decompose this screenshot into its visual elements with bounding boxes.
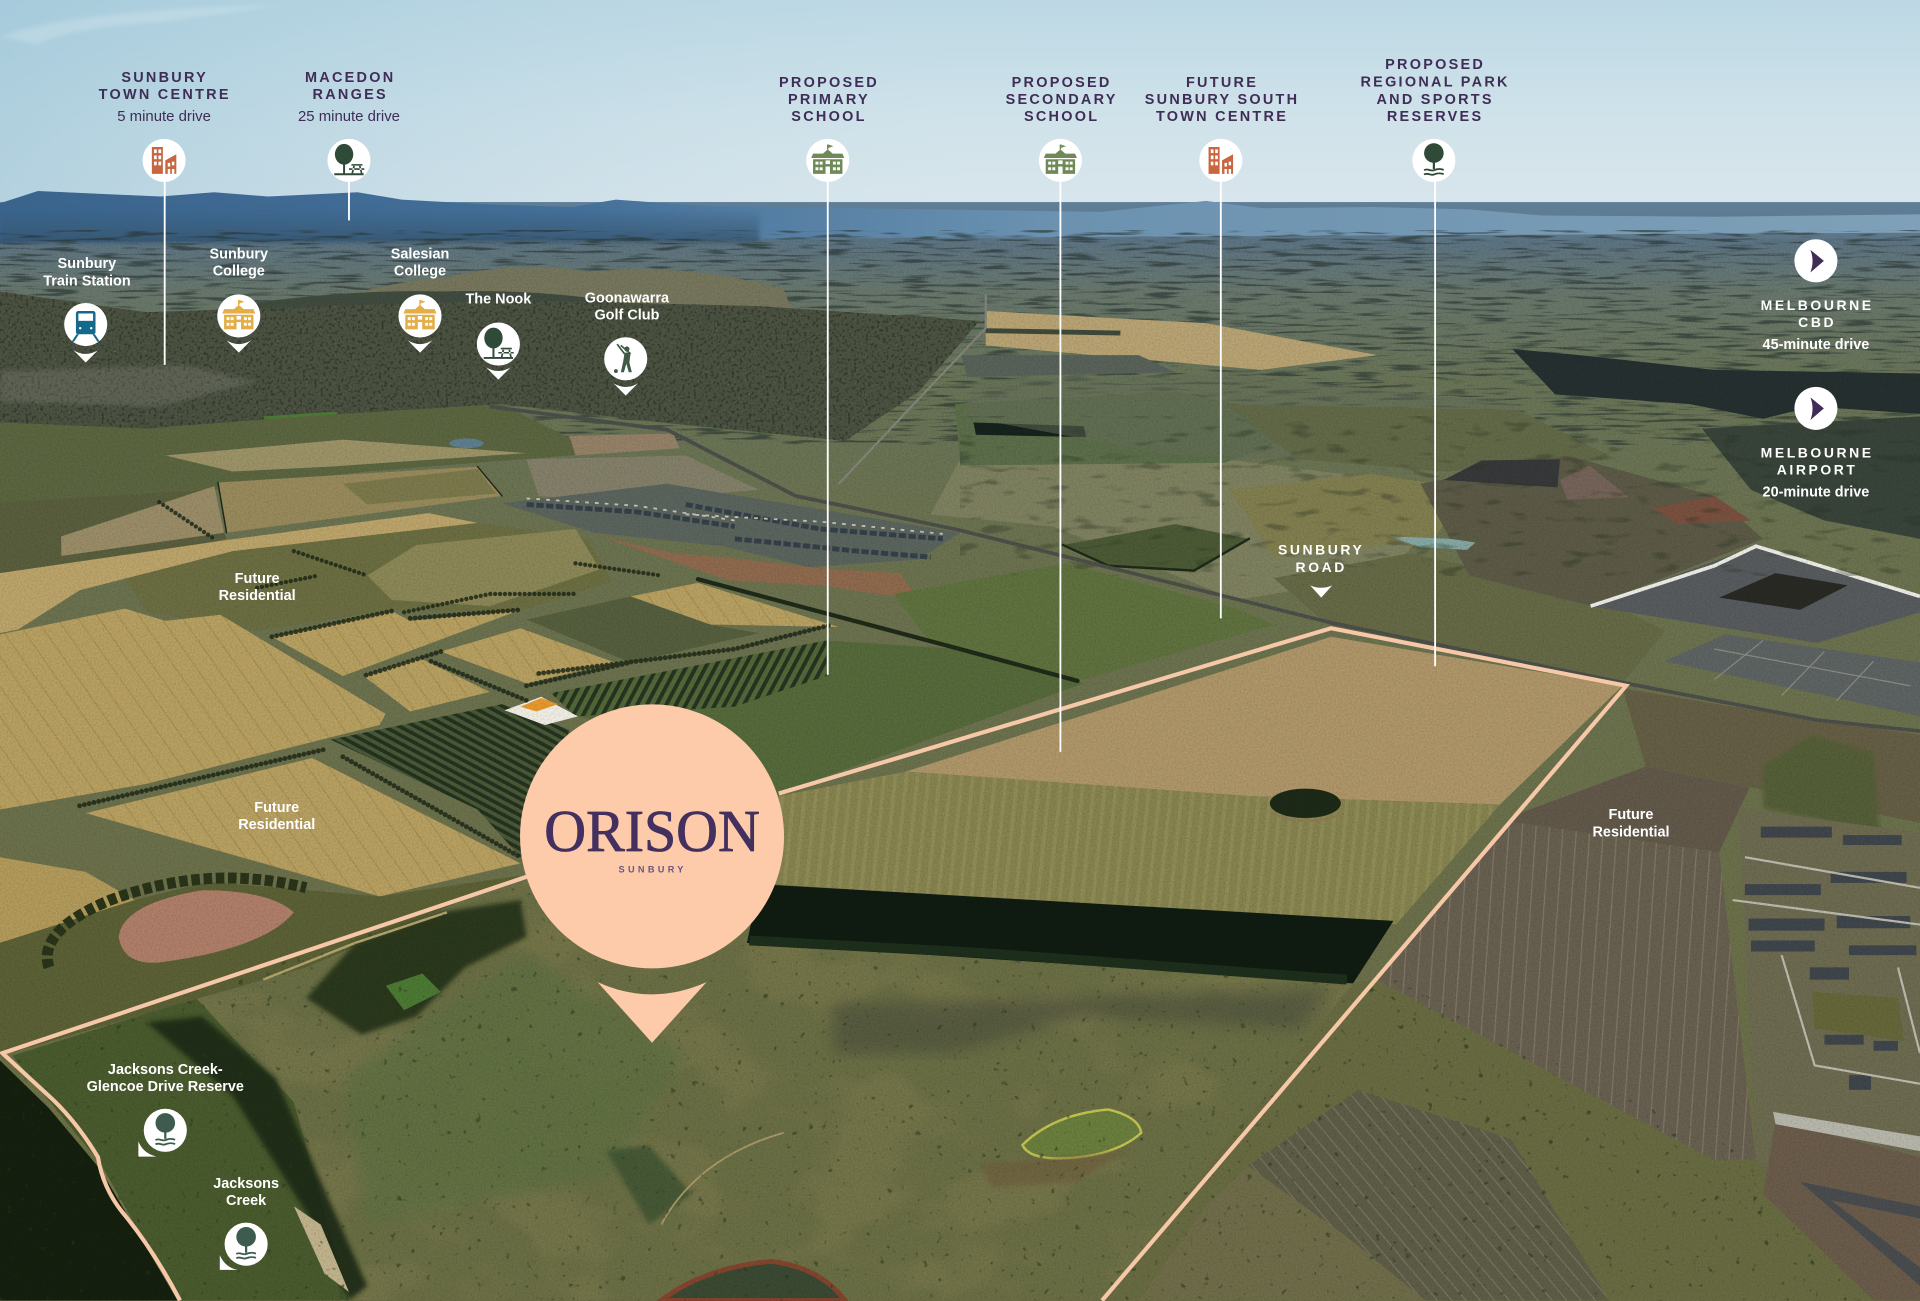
pin: Salesian College: College <box>394 264 446 280</box>
lower site shrubs <box>0 882 1353 1301</box>
quarry <box>1420 456 1763 606</box>
estate rooftop rows <box>527 505 943 557</box>
icon: arrow <box>1810 250 1824 272</box>
destination: Melbourne CBD: CBD <box>1798 314 1836 330</box>
pin: Salesian College: Salesian <box>391 246 449 262</box>
site upper field <box>906 637 1622 805</box>
greens north of paddocks <box>955 392 1335 465</box>
south ploughed field two <box>1139 1166 1425 1301</box>
sky <box>0 0 1920 227</box>
olive paddock <box>122 523 612 631</box>
dry fields far <box>986 311 1378 370</box>
destination: Melbourne CBD: 45-minute drive <box>1763 337 1869 353</box>
suburb streets <box>1733 857 1920 1084</box>
label: MACEDON <box>305 70 395 86</box>
clump soil ring <box>1273 814 1341 821</box>
label: PROPOSED <box>779 75 879 91</box>
pin: Proposed Regional Park and Sports Reserves: REGIONAL PARK <box>1360 74 1510 90</box>
pin: Jacksons Creek: Jacksons <box>213 1176 279 1192</box>
pointer <box>138 1141 157 1157</box>
left forest <box>0 1060 178 1301</box>
pin: Goonawarra Golf Club: Goonawarra <box>585 290 670 306</box>
label: SUNBURY <box>121 70 208 86</box>
pin: Goonawarra Golf Club <box>585 290 670 396</box>
town centre lighter strip <box>0 365 257 407</box>
marker <box>144 1109 187 1152</box>
dotted tree rows <box>80 610 833 857</box>
tree lines <box>80 467 1249 857</box>
pin: Jacksons Creek-Glencoe Drive Reserve: Glencoe Drive Reserve <box>87 1079 244 1095</box>
fence <box>1063 539 1249 571</box>
dry fields gap <box>986 328 1120 336</box>
paddocks north of road <box>931 459 1469 600</box>
west low land <box>0 490 227 576</box>
pin: Future Sunbury South Town Centre: SUNBURY SOUTH <box>1145 92 1299 108</box>
east ploughed field <box>1376 822 1756 1160</box>
pin: Sunbury Train Station: Sunbury <box>58 256 116 272</box>
pin: Sunbury College <box>209 246 268 353</box>
quarry red earth <box>1653 496 1751 524</box>
main road <box>490 407 1920 731</box>
homestead lawn <box>386 974 441 1010</box>
destination: Melbourne Airport: 20-minute drive <box>1763 485 1869 501</box>
central tree clump <box>1270 789 1341 818</box>
suburb houses <box>1745 827 1916 1090</box>
gold field two <box>272 610 520 676</box>
green grass left <box>343 955 686 1225</box>
pink lake <box>119 890 294 963</box>
tan paddock west <box>165 440 527 471</box>
label: FUTURE <box>1186 75 1258 91</box>
label: Sunbury Road: ROAD <box>1296 559 1347 575</box>
green bank <box>12 998 349 1301</box>
pin: Macedon Ranges: RANGES <box>313 87 388 103</box>
forest right lower <box>1702 416 1920 539</box>
township tree speckle <box>0 288 980 447</box>
south-east shrubs <box>1102 980 1920 1301</box>
marker <box>225 1223 268 1266</box>
pin: Macedon Ranges <box>298 70 400 220</box>
pointer <box>220 1255 238 1270</box>
red earthworks <box>600 536 918 600</box>
pin: Sunbury Train Station <box>43 256 131 362</box>
marker <box>64 303 107 346</box>
green sports fields <box>263 411 422 440</box>
homestead trees <box>306 900 527 1035</box>
north road <box>839 294 986 484</box>
far field streaks <box>0 230 1920 445</box>
homestead <box>504 697 578 725</box>
destination: Melbourne Airport <box>1761 387 1874 501</box>
distant mountains <box>0 191 1920 242</box>
estate ground <box>502 484 960 567</box>
connector line <box>164 171 166 365</box>
pin: Proposed Secondary School <box>1006 75 1118 752</box>
farm break <box>218 467 502 533</box>
homestead track <box>263 912 447 980</box>
mountain lower shadow <box>0 206 759 242</box>
township roofs <box>0 288 980 447</box>
paddock trees <box>159 502 661 612</box>
pin: Jacksons Creek: Creek <box>226 1193 267 1209</box>
south ploughed field <box>1248 1090 1609 1301</box>
grey tailings <box>1591 546 1920 643</box>
pine strip hedge <box>749 940 1347 980</box>
marker <box>398 294 442 337</box>
pin: Proposed Primary School <box>779 75 879 675</box>
green paddock south of road <box>894 563 1273 680</box>
bottom dam <box>661 1261 845 1301</box>
pine block <box>973 422 1086 437</box>
paddock west <box>61 486 224 556</box>
marker <box>1794 387 1837 430</box>
pin: Macedon Ranges: 25 minute drive <box>298 108 400 125</box>
site lower field <box>771 771 1500 925</box>
teal pond <box>1390 536 1476 550</box>
gold field five <box>631 583 839 627</box>
pin: Sunbury Town Centre <box>99 70 231 365</box>
far estate <box>961 355 1176 377</box>
township <box>0 291 980 441</box>
wordmark: ORISON <box>544 799 760 864</box>
south-east road <box>1800 1182 1920 1286</box>
pond small <box>449 438 484 448</box>
icon: train <box>72 311 100 342</box>
pin: Proposed Regional Park and Sports Reserves: AND SPORTS <box>1376 92 1494 108</box>
forest right <box>1512 349 1920 419</box>
construction tan pad <box>569 434 680 456</box>
estate pale rooftops <box>527 498 943 534</box>
gold field south-west <box>86 758 520 896</box>
pin: Goonawarra Golf Club: Golf Club <box>594 308 660 324</box>
fenced property <box>1063 524 1249 571</box>
tailings dark centre <box>1719 573 1848 610</box>
icon: arrow <box>1810 397 1824 420</box>
dirt bottom right <box>1763 1120 1920 1301</box>
new streets <box>1773 1112 1920 1151</box>
sub wordmark: SUNBURY <box>619 865 687 875</box>
boundary hedges <box>698 579 1078 681</box>
quarry dark mound <box>1444 459 1560 487</box>
lighter grazing paddock <box>367 529 600 606</box>
label: Sunbury Road <box>1278 542 1364 598</box>
Orison logo badge <box>520 704 784 1043</box>
pin: Proposed Regional Park and Sports Reserves <box>1360 57 1510 666</box>
sky tint left <box>0 0 1920 227</box>
hill slopes centre <box>1224 404 1616 471</box>
pine strip <box>747 884 1393 983</box>
pin: Jacksons Creek-Glencoe Drive Reserve <box>87 1062 244 1157</box>
low land round dam <box>0 876 520 1056</box>
pin: Sunbury College: College <box>213 264 265 280</box>
pin: Proposed Primary School: SCHOOL <box>791 109 867 125</box>
label: Future Residential east: Future <box>1609 807 1653 823</box>
construction ground <box>527 456 759 502</box>
label: Future Residential east: Residential <box>1593 824 1670 840</box>
dam surrounds <box>980 1151 1127 1188</box>
mid-ground streaks <box>960 416 1920 576</box>
yellow grass slope <box>1229 474 1474 557</box>
lower site mottling <box>104 925 1352 1300</box>
marker <box>477 323 520 366</box>
destination: Melbourne CBD: MELBOURNE <box>1761 297 1874 313</box>
pin: Future Sunbury South Town Centre: TOWN CENTRE <box>1156 109 1288 125</box>
lot greens <box>1812 992 1904 1041</box>
destination: Melbourne Airport: AIRPORT <box>1777 462 1858 478</box>
forested corner east <box>1763 735 1880 833</box>
pads grid <box>1714 640 1910 700</box>
pin: The Nook: The Nook <box>465 292 532 308</box>
dam green <box>1022 1109 1141 1158</box>
marker <box>1794 239 1837 282</box>
marker <box>327 139 371 182</box>
site boundary outline <box>2 628 1626 1301</box>
marker <box>1199 139 1242 182</box>
pin: Jacksons Creek <box>213 1176 279 1270</box>
marker <box>217 294 260 337</box>
orchard north <box>551 640 827 716</box>
pale creek sand <box>294 1206 349 1292</box>
pin: Sunbury Town Centre: 5 minute drive <box>117 108 211 125</box>
marker <box>806 139 849 182</box>
rural right <box>1273 554 1665 683</box>
label: Future Residential west: Future <box>254 800 299 816</box>
destination: Melbourne Airport: MELBOURNE <box>1761 444 1874 460</box>
pin: Proposed Secondary School: SECONDARY <box>1006 92 1118 108</box>
paddock east of road <box>1622 688 1920 823</box>
curved track <box>661 1133 784 1225</box>
pin: Proposed Primary School: PRIMARY <box>788 92 870 108</box>
pin: Future Sunbury South Town Centre <box>1145 75 1299 618</box>
pin: Proposed Secondary School: SCHOOL <box>1024 109 1099 125</box>
dark creek trees <box>147 1016 367 1301</box>
label: PROPOSED <box>1012 75 1112 91</box>
pin: Jacksons Creek-Glencoe Drive Reserve: Jacksons Creek- <box>108 1062 223 1078</box>
south-east land <box>1102 980 1920 1301</box>
pin: Sunbury Town Centre: TOWN CENTRE <box>99 87 231 103</box>
orchard west <box>331 704 569 857</box>
tree ring dam <box>47 878 306 967</box>
pin: Salesian College <box>391 246 449 353</box>
quarry brown mound <box>1560 465 1629 500</box>
green land west <box>0 404 600 502</box>
badge pointer <box>598 982 707 1043</box>
pin: The Nook <box>465 292 532 380</box>
label: Future Residential north: Residential <box>219 588 296 604</box>
brown paddock <box>218 467 502 533</box>
large gold field left <box>0 609 386 809</box>
grey pads <box>1664 634 1920 716</box>
pin: Sunbury Train Station: Train Station <box>43 273 131 289</box>
darker hill ridge <box>233 291 686 323</box>
marker <box>604 337 647 380</box>
far green paddock <box>961 373 1518 463</box>
marker <box>1039 139 1082 182</box>
gold field corner <box>0 857 135 943</box>
label: Sunbury Road: SUNBURY <box>1278 542 1364 558</box>
destination: Melbourne CBD <box>1761 239 1874 353</box>
wet gully <box>606 1145 692 1225</box>
dark green paddock <box>527 596 759 663</box>
dark grass band <box>833 989 1335 1053</box>
pin: Proposed Regional Park and Sports Reserves: RESERVES <box>1387 109 1483 125</box>
homestead roof <box>520 698 558 711</box>
green land by orchards <box>576 640 1084 794</box>
brown hills behind town <box>294 267 796 323</box>
label: Future Residential north: Future <box>235 571 280 587</box>
gold field four <box>441 628 615 683</box>
marker <box>1412 139 1455 182</box>
icon: golfer <box>614 344 632 373</box>
label: PROPOSED <box>1385 57 1485 73</box>
pin: Sunbury College: Sunbury <box>209 246 268 262</box>
greener patch in paddock <box>343 469 496 505</box>
marker <box>143 139 186 182</box>
lower site land <box>0 882 1353 1301</box>
long gold field <box>0 513 478 633</box>
east paddock <box>1511 767 1750 852</box>
tailings white rim <box>1591 546 1920 606</box>
wispy cloud <box>0 5 282 44</box>
suburb land <box>1739 808 1920 1225</box>
gold field three <box>364 658 490 711</box>
label: Future Residential west: Residential <box>238 817 315 833</box>
